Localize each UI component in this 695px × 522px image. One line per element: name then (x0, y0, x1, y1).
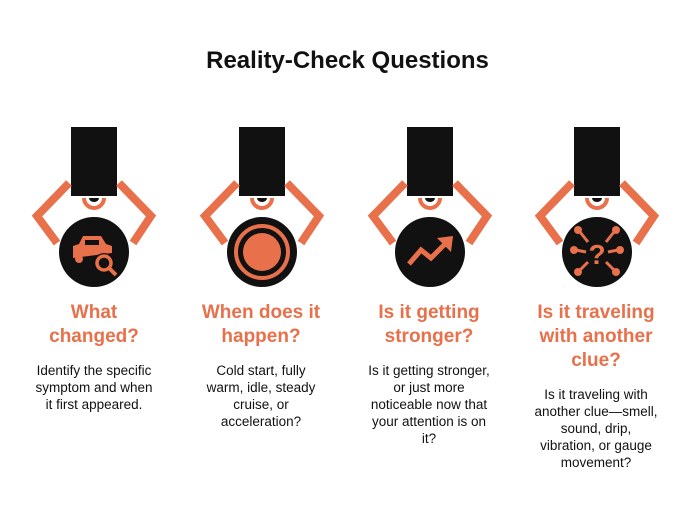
text 4: Is it traveling with (544, 387, 648, 402)
text 4: vibration, or gauge (540, 438, 652, 453)
text 1: Identify the specific (37, 363, 151, 378)
text 1: symptom and when (35, 380, 153, 395)
text 4: movement? (561, 455, 631, 470)
text 2: acceleration? (221, 414, 301, 429)
text 3: it? (422, 431, 436, 446)
heading 2: When does it (202, 302, 320, 323)
text 3: Is it getting stronger, (368, 363, 490, 378)
text 4: another clue—smell, (534, 404, 658, 419)
heading 4: with another (540, 326, 652, 347)
heading 1: What (71, 302, 117, 323)
text 2: cruise, or (233, 397, 289, 412)
icon: question network (540, 127, 654, 287)
heading 4 (537, 302, 655, 371)
icon: target (205, 127, 319, 287)
heading 4: clue? (571, 350, 621, 371)
heading 3: stronger? (385, 326, 473, 347)
text 4: sound, drip, (561, 421, 631, 436)
text 1: it first appeared. (46, 397, 142, 412)
text 2 (206, 363, 316, 429)
heading 1 (49, 302, 139, 347)
icon: car search (37, 127, 151, 287)
text 1 (35, 363, 153, 412)
text 2: Cold start, fully (216, 363, 306, 378)
text 3: or just more (393, 380, 465, 395)
text 4 (534, 387, 658, 470)
icon: question network: ? (588, 239, 606, 270)
heading 3: Is it getting (378, 302, 480, 323)
text 3: your attention is on (372, 414, 486, 429)
heading 2: happen? (221, 326, 301, 347)
text 3: noticeable now that (371, 397, 487, 412)
heading 2 (202, 302, 320, 347)
icon: trend up (373, 127, 487, 287)
text 3 (368, 363, 490, 446)
heading 3 (378, 302, 480, 347)
heading 4: Is it traveling (537, 302, 655, 323)
text 2: warm, idle, steady (207, 380, 315, 395)
title: Reality-Check Questions (206, 47, 489, 74)
heading 1: changed? (49, 326, 139, 347)
